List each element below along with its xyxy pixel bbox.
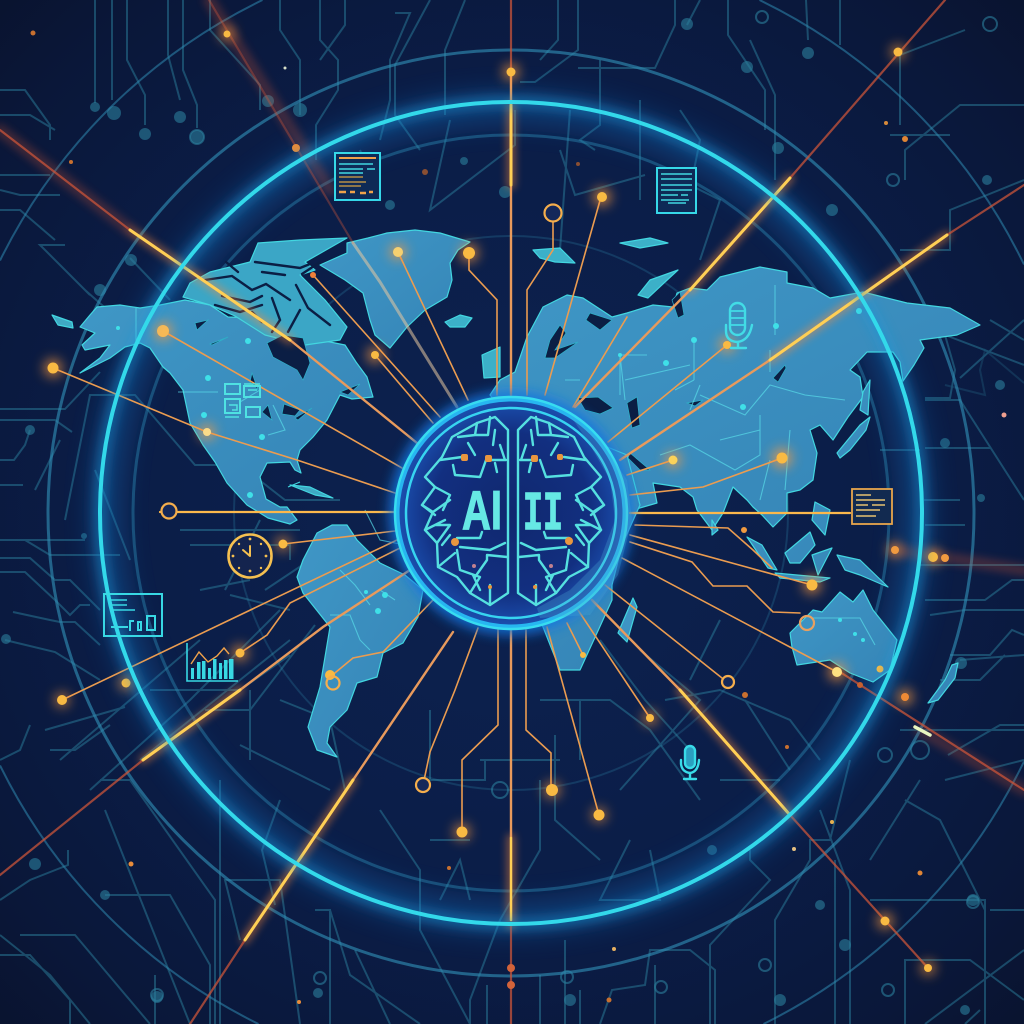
bright streak	[915, 727, 930, 735]
icon: bar and line chart	[187, 643, 238, 681]
left brain hemisphere	[422, 417, 508, 605]
pale beam across Greenland	[353, 243, 457, 407]
world map	[52, 230, 980, 757]
icon: grid of cards on map	[225, 384, 260, 417]
continent: Africa	[440, 430, 640, 670]
continent: South America	[297, 525, 423, 757]
label: AI: AI	[462, 479, 502, 541]
pale inner rays	[240, 70, 790, 838]
central brain hub	[389, 391, 633, 635]
main cyan ring	[100, 102, 922, 924]
islands: Madagascar and New Zealand	[618, 598, 958, 703]
bright yellow ray segments	[130, 105, 947, 940]
hub disc	[397, 399, 625, 627]
archipelago channels	[205, 262, 330, 332]
right brain hemisphere	[518, 417, 604, 605]
islands: Caribbean	[288, 482, 333, 498]
map internal borders and network lines	[136, 285, 875, 650]
icon: clock	[228, 534, 272, 578]
icon: document right	[852, 489, 892, 524]
icon: document top right	[657, 168, 696, 213]
seas and lakes	[195, 292, 786, 470]
continent: Greenland	[320, 230, 470, 348]
brain synapse dots	[451, 454, 573, 589]
islands: Indonesia, Philippines and Japan	[712, 380, 888, 587]
label: II: II	[523, 483, 563, 546]
icon: dashboard panel	[104, 594, 162, 636]
Africa and Arabia overlay on hub rim	[537, 415, 632, 618]
icon: document top left	[335, 153, 380, 200]
icon: microphone on map	[726, 303, 752, 348]
ring nodes	[162, 204, 814, 792]
hub rings	[395, 397, 627, 629]
continent: Eurasia	[490, 267, 980, 530]
islands: British Isles, Iceland and Arctic	[445, 238, 678, 378]
cyan map dots	[116, 308, 865, 642]
islands: Canadian Arctic archipelago	[183, 238, 347, 345]
continent: Australia	[790, 590, 897, 682]
ring glow	[106, 108, 916, 918]
thin rays to nodes	[53, 197, 837, 832]
icon: microphone bottom	[681, 746, 699, 779]
continent: North America	[80, 300, 373, 524]
